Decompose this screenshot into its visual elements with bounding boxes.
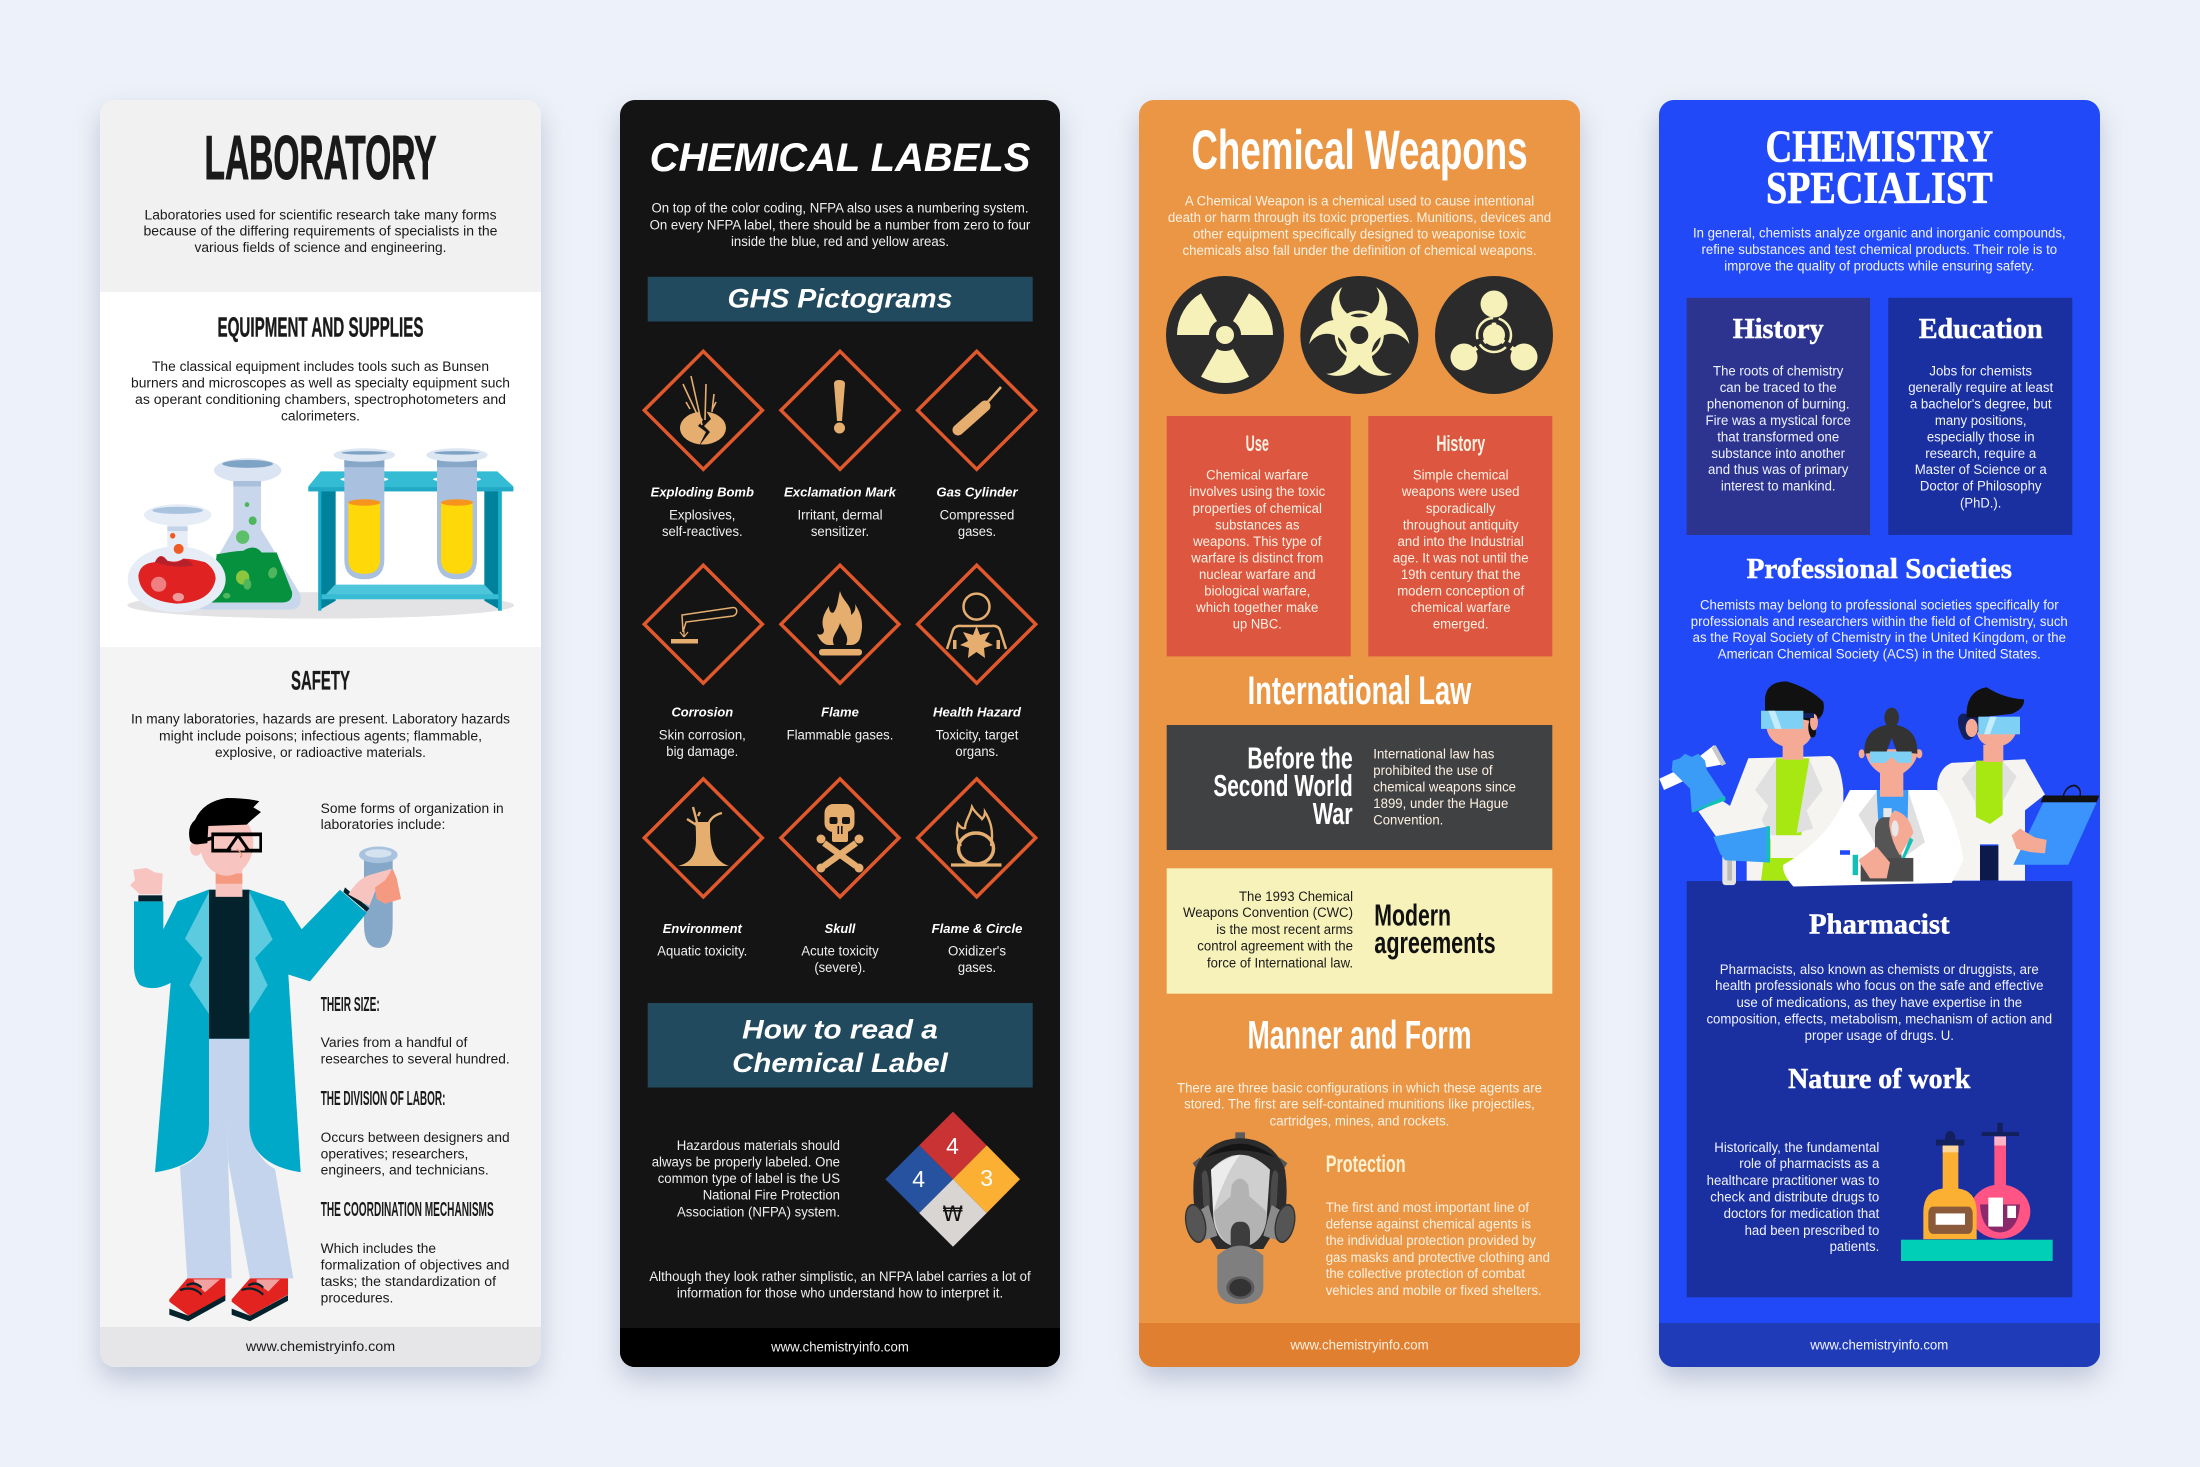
card: history of weapons: Simple chemical [1413, 468, 1509, 483]
text block: coordination mechanisms: tasks; the standardization of [321, 1274, 496, 1289]
text block: weapons intro: A Chemical Weapon is a chemical used to cause intentional [1185, 194, 1534, 209]
card: history of chemistry: interest to mankind. [1721, 479, 1836, 494]
text block: professional societies [1691, 597, 2068, 662]
card: history of chemistry: Fire was a mystical force [1706, 413, 1851, 428]
text block: safety [131, 712, 510, 760]
text block: division of labor: Occurs between designers and [321, 1130, 510, 1145]
text block: division of labor: engineers, and technicians. [321, 1163, 489, 1178]
card: use: substances as [1215, 517, 1300, 532]
text block: their size: THEIR SIZE: [321, 994, 380, 1016]
text block: hazardous materials: always be properly labeled. One [652, 1155, 840, 1170]
chart: nfpa diamond: 3 [980, 1165, 993, 1191]
text block: manner and form [1177, 1080, 1542, 1128]
label: gas cylinder: Compressed [940, 507, 1014, 522]
footer: chemical weapons [1139, 1323, 1580, 1367]
pictogram: flame [781, 565, 899, 683]
text block: labels intro [650, 200, 1031, 249]
label: flame and circle: Oxidizer's [948, 943, 1006, 958]
panel: laboratory [100, 100, 541, 1367]
label: gas cylinder: gases. [958, 524, 996, 539]
pictogram: exploding bomb [644, 351, 762, 469]
card: education: Doctor of Philosophy [1920, 479, 2042, 494]
card: before the second world war: Convention. [1373, 813, 1443, 828]
chart: nfpa diamond: 4 [946, 1133, 959, 1159]
text block: protection: Protection [1326, 1151, 1406, 1178]
text block: division of labor [321, 1088, 510, 1178]
chart: nfpa diamond: ₩ [942, 1202, 963, 1226]
card: history of chemistry: can be traced to the [1720, 380, 1837, 395]
label: flame: Flammable gases. [787, 727, 893, 742]
text block: manner and form: cartridges, mines, and rockets. [1270, 1113, 1449, 1128]
text block: protection: the individual protection provided by [1326, 1233, 1536, 1248]
card: modern agreements: control agreement with the [1197, 939, 1353, 954]
text block: manner and form: stored. The first are self-contained munitions like projectiles, [1184, 1097, 1535, 1112]
card: pharmacist: Pharmacist [1809, 909, 1950, 941]
card: modern agreements: Modern [1374, 898, 1451, 932]
card: use: up NBC. [1233, 616, 1282, 632]
text block: safety: In many laboratories, hazards are present. Laboratory hazards [131, 712, 510, 727]
card: before the second world war: War [1313, 796, 1353, 831]
text block: professional societies: American Chemical Society (ACS) in the United States. [1718, 647, 2041, 662]
card: use: biological warfare, [1204, 584, 1310, 598]
card: before the second world war: 1899, under the Hague [1373, 796, 1508, 811]
card: education: a bachelor's degree, but [1910, 396, 2052, 411]
heading: manner and form: Manner and Form [1248, 1014, 1472, 1058]
label: corrosion: big damage. [666, 744, 738, 759]
text block: nfpa explanation: Although they look rather simplistic, an NFPA label carries a lot of [649, 1269, 1031, 1284]
card: use: which together make [1195, 600, 1318, 615]
label: health hazard: organs. [955, 744, 999, 759]
text block: labels intro: On top of the color coding, NFPA also uses a numbering system. [652, 200, 1028, 216]
text block: their size [321, 994, 510, 1066]
text block: division of labor: operatives; researchers, [321, 1146, 468, 1161]
card: pharmacist: Nature of work [1788, 1063, 1971, 1095]
label: exclamation mark: Exclamation Mark [784, 484, 897, 499]
text block: specialist intro: In general, chemists analyze organic and inorganic compounds, [1693, 226, 2066, 241]
illustration: pharmacy bottles [1901, 1123, 2053, 1261]
chart: nfpa diamond: 4 [912, 1166, 925, 1192]
heading: professional societies: Professional Societies [1747, 553, 2012, 585]
banner: how to read a chemical label: How to read a [742, 1015, 938, 1045]
card: before the second world war: prohibited the use of [1373, 763, 1493, 778]
label: exploding bomb: self-reactives. [662, 524, 743, 539]
label: environment: Environment [663, 921, 742, 936]
title: chemical weapons: Chemical Weapons [1191, 118, 1528, 181]
icon: radiation [1165, 276, 1284, 397]
card: use: properties of chemical [1193, 501, 1322, 516]
card: modern agreements [1167, 868, 1552, 994]
banner: ghs pictograms [648, 277, 1033, 322]
text block: equipment: burners and microscopes as well as specialty equipment such [131, 376, 510, 390]
icon: biohazard [1300, 276, 1418, 394]
card: use: warfare is distinct from [1190, 551, 1323, 566]
card: education: Master of Science or a [1915, 462, 2047, 477]
card: education [1888, 298, 2072, 535]
card: history of weapons: throughout antiquity [1403, 517, 1519, 532]
card: pharmacist: use of medications, as they have expertise in the [1736, 995, 2022, 1010]
card: pharmacist: Pharmacists, also known as chemists or druggists, are [1720, 962, 2039, 977]
card: pharmacist: patients. [1830, 1239, 1879, 1254]
footer: chemical labels: www.chemistryinfo.com [770, 1340, 909, 1354]
label: exploding bomb: Exploding Bomb [651, 484, 754, 499]
card: pharmacist: healthcare practitioner was to [1707, 1173, 1879, 1188]
card: use: weapons. This type of [1192, 534, 1322, 549]
card: history of chemistry: and thus was of primary [1708, 462, 1849, 477]
label: environment [657, 921, 747, 958]
label: exclamation mark: Irritant, dermal [798, 507, 882, 522]
card: pharmacist: composition, effects, metabolism, mechanism of action and [1706, 1012, 2052, 1027]
label: corrosion: Skin corrosion, [659, 727, 746, 742]
text block: protection: vehicles and mobile or fixed shelters. [1326, 1283, 1542, 1298]
footer: chemistry specialist: www.chemistryinfo.com [1809, 1337, 1948, 1352]
card: history of weapons: age. It was not until the [1393, 551, 1529, 566]
card: before the second world war: Before the [1247, 740, 1353, 775]
text block: their size: researches to several hundred. [321, 1051, 510, 1066]
card: modern agreements: force of International law. [1207, 955, 1353, 970]
illustration: scientist with test tube [130, 798, 401, 1321]
title: chemistry specialist: SPECIALIST [1766, 163, 1993, 213]
text block: labels intro: On every NFPA label, there should be a number from zero to four [650, 217, 1031, 232]
card: pharmacist: Historically, the fundamental [1714, 1140, 1879, 1155]
text block: organization forms: laboratories include: [321, 817, 445, 832]
text block: manner and form: There are three basic configurations in which these agents are [1177, 1080, 1542, 1095]
text block: coordination mechanisms: procedures. [321, 1291, 393, 1306]
text block: laboratory intro: various fields of science and engineering. [194, 240, 446, 255]
text block: specialist intro [1693, 226, 2066, 274]
card: history of chemistry: phenomenon of burning. [1707, 396, 1850, 411]
text block: professional societies: professionals and researchers within the field of Chemistry, such [1691, 614, 2068, 629]
text block: coordination mechanisms: formalization of objectives and [321, 1258, 509, 1273]
panel: chemistry specialist [1659, 100, 2100, 1367]
footer: chemical labels [620, 1328, 1060, 1367]
text block: organization forms: Some forms of organization in [321, 801, 504, 816]
label: flame and circle [932, 921, 1022, 975]
text block: weapons intro [1168, 194, 1551, 258]
title: chemistry specialist: CHEMISTRY [1765, 122, 1993, 172]
pictogram: skull [781, 779, 899, 897]
card: before the second world war: International law has [1373, 747, 1495, 762]
card: use: Use [1246, 431, 1269, 456]
label: gas cylinder: Gas Cylinder [936, 484, 1019, 499]
pictogram: flame and circle [918, 779, 1036, 897]
label: exploding bomb: Explosives, [669, 507, 735, 522]
card: education: generally require at least [1908, 380, 2053, 395]
footer: chemistry specialist [1659, 1323, 2100, 1367]
banner: ghs pictograms: GHS Pictograms [728, 283, 952, 313]
text block: nfpa explanation: information for those who understand how to interpret it. [677, 1285, 1003, 1300]
text block: protection [1326, 1151, 1550, 1298]
card: use: Chemical warfare [1206, 468, 1308, 483]
banner: how to read a chemical label [648, 1003, 1033, 1088]
card: history of weapons: chemical warfare [1411, 600, 1511, 615]
text block: hazardous materials: Hazardous materials should [677, 1138, 840, 1153]
text block: equipment: as operant conditioning chambers, spectrophotometers and [135, 392, 506, 407]
card: modern agreements: agreements [1374, 925, 1496, 960]
banner: how to read a chemical label: Chemical Label [732, 1048, 948, 1078]
label: exclamation mark: sensitizer. [811, 524, 869, 539]
text block: weapons intro: chemicals also fall under the definition of chemical weapons. [1182, 243, 1536, 258]
label: flame: Flame [821, 704, 859, 719]
panel: chemical weapons [1139, 100, 1580, 1367]
label: skull: (severe). [814, 960, 866, 975]
heading: safety: SAFETY [291, 666, 350, 696]
label: skull: Skull [825, 921, 856, 936]
label: health hazard [933, 704, 1022, 759]
card: education: Education [1919, 313, 2043, 345]
label: gas cylinder [936, 484, 1019, 539]
illustration: gas mask [1182, 1132, 1298, 1304]
label: health hazard: Health Hazard [933, 704, 1022, 719]
card: pharmacist: role of pharmacists as a [1739, 1156, 1880, 1171]
card: pharmacist: had been prescribed to [1745, 1223, 1879, 1238]
card: education: many positions, [1935, 413, 2027, 428]
label: environment: Aquatic toxicity. [657, 943, 747, 958]
card: history of chemistry: The roots of chemistry [1713, 364, 1844, 378]
text block: equipment: The classical equipment includes tools such as Bunsen [152, 359, 489, 374]
text block: division of labor: THE DIVISION OF LABOR: [321, 1088, 445, 1110]
label: skull [801, 921, 879, 975]
text block: safety: explosive, or radioactive materials. [215, 745, 426, 760]
text block: laboratory intro: because of the differing requirements of specialists in the [144, 224, 498, 239]
text block: protection: gas masks and protective clothing and [1326, 1250, 1550, 1265]
pictogram: gas cylinder [918, 351, 1036, 469]
card: history of weapons: History [1436, 431, 1486, 456]
card: modern agreements: The 1993 Chemical [1239, 889, 1353, 904]
card: modern agreements: is the most recent arms [1216, 922, 1353, 937]
card: pharmacist: proper usage of drugs. U. [1805, 1028, 1954, 1043]
title: chemical labels: CHEMICAL LABELS [650, 136, 1031, 180]
label: exclamation mark [784, 487, 896, 536]
card: history of chemistry: that transformed one [1717, 429, 1839, 444]
card: before the second world war: chemical weapons since [1373, 780, 1516, 795]
card: education: (PhD.). [1960, 496, 2001, 510]
card: pharmacist [1687, 881, 2072, 1297]
label: flame and circle: gases. [958, 960, 996, 975]
label: flame [787, 704, 893, 742]
label: skull: Acute toxicity [801, 943, 879, 958]
text block: hazardous materials: National Fire Protection [703, 1188, 840, 1203]
card: history of chemistry: substance into another [1711, 446, 1846, 461]
title: laboratory: LABORATORY [204, 124, 436, 193]
card: history of weapons [1368, 416, 1552, 656]
label: health hazard: Toxicity, target [936, 727, 1019, 742]
card: education: Jobs for chemists [1929, 364, 2032, 378]
text block: labels intro: inside the blue, red and yellow areas. [731, 234, 949, 249]
title: chemistry specialist [1765, 122, 1993, 213]
card: before the second world war: Second World [1213, 768, 1353, 803]
chart: nfpa diamond [885, 1112, 1020, 1247]
icon: chemical hazard [1435, 276, 1553, 394]
text block: specialist intro: improve the quality of products while ensuring safety. [1724, 259, 2034, 274]
text block: professional societies: as the Royal Society of Chemistry in the United Kingdom, or the [1693, 630, 2066, 645]
text block: organization forms [321, 803, 503, 829]
text block: protection: defense against chemical agents is [1326, 1217, 1531, 1232]
card: education: especially those in [1927, 429, 2035, 444]
text block: hazardous materials: Association (NFPA) system. [677, 1204, 840, 1219]
label: corrosion: Corrosion [671, 704, 733, 719]
footer: laboratory [100, 1327, 541, 1367]
footer: chemical weapons: www.chemistryinfo.com [1289, 1337, 1429, 1352]
card: education: research, require a [1925, 446, 2037, 461]
text block: laboratory intro [144, 207, 498, 255]
text block: professional societies: Chemists may belong to professional societies specifically for [1700, 597, 2059, 612]
footer: laboratory: www.chemistryinfo.com [245, 1339, 395, 1354]
heading: equipment and supplies: EQUIPMENT AND SUPPLIES [218, 311, 424, 342]
card: history of weapons: emerged. [1433, 616, 1489, 632]
text block: equipment [131, 359, 510, 423]
card: before the second world war [1167, 725, 1552, 850]
pictogram: health hazard [918, 565, 1036, 683]
illustration: three chemists [1659, 681, 2099, 886]
card: history of weapons: weapons were used [1401, 484, 1520, 499]
text block: coordination mechanisms: Which includes the [321, 1241, 436, 1256]
card: use: involves using the toxic [1189, 484, 1326, 499]
card: history of weapons: sporadically [1426, 501, 1496, 516]
pictogram: environment [644, 779, 762, 897]
text block: hazardous materials [652, 1138, 840, 1219]
pictogram: corrosion [644, 565, 762, 683]
illustration: flasks and test tube rack [127, 448, 514, 619]
text block: specialist intro: refine substances and test chemical products. Their role is to [1701, 242, 2057, 257]
text block: laboratory intro: Laboratories used for scientific research take many forms [144, 207, 497, 222]
text block: coordination mechanisms [321, 1199, 509, 1306]
text block: nfpa explanation [649, 1269, 1031, 1300]
card: history of weapons: 19th century that the [1401, 567, 1521, 582]
card: history of weapons: modern conception of [1397, 584, 1524, 598]
card: modern agreements: Weapons Convention (CWC) [1183, 905, 1353, 920]
text block: weapons intro: other equipment specifically designed to weaponise toxic [1193, 226, 1526, 242]
text block: their size: Varies from a handful of [321, 1035, 468, 1050]
card: use: nuclear warfare and [1199, 567, 1316, 582]
card: pharmacist: health professionals who focus on the safe and effective [1715, 978, 2043, 993]
heading: international law: International Law [1248, 669, 1472, 713]
card: history of chemistry [1687, 298, 1870, 535]
text block: weapons intro: death or harm through its toxic properties. Munitions, devices and [1168, 210, 1551, 225]
card: pharmacist: check and distribute drugs to [1710, 1190, 1879, 1205]
panel: chemical labels [620, 100, 1060, 1367]
card: use [1167, 416, 1351, 656]
text block: coordination mechanisms: THE COORDINATION MECHANISMS [321, 1199, 494, 1221]
card: pharmacist: doctors for medication that [1724, 1206, 1880, 1221]
text block: hazardous materials: common type of label is the US [658, 1171, 840, 1186]
text block: protection: The first and most important line of [1326, 1200, 1529, 1215]
label: flame and circle: Flame & Circle [932, 921, 1022, 936]
card: history of chemistry: History [1733, 313, 1824, 345]
text block: safety: might include poisons; infectious agents; flammable, [159, 728, 482, 743]
text block: protection: the collective protection of combat [1326, 1266, 1525, 1281]
card: history of weapons: and into the Industrial [1398, 534, 1524, 549]
label: corrosion [659, 704, 746, 759]
label: exploding bomb [651, 484, 754, 539]
text block: equipment: calorimeters. [281, 408, 360, 423]
pictogram: exclamation mark [781, 351, 899, 469]
